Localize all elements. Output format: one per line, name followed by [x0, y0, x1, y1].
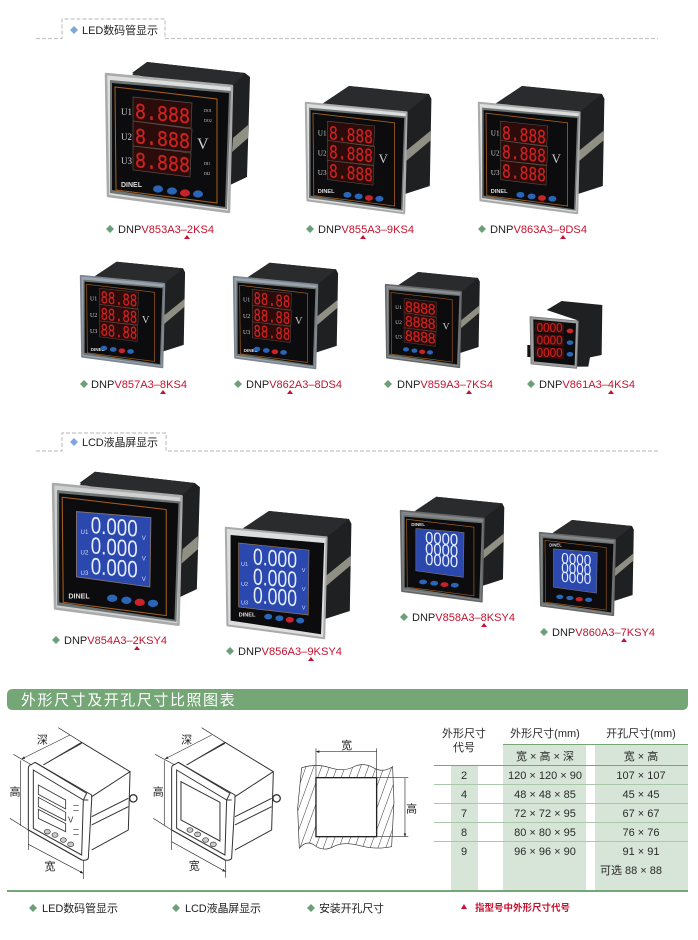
dimension table: 96 × 96 × 90	[514, 846, 576, 858]
meter: DNPV862A3-8DS4: 88.88	[254, 290, 290, 314]
meter: DNPV862A3-8DS4: V	[295, 316, 303, 327]
section heading: LCD display	[36, 433, 658, 451]
meter: DNPV859A3-7KS4: U3	[395, 335, 402, 341]
meter: DNPV862A3-8DS4: U2	[243, 314, 250, 320]
dimension table: 开孔尺寸(mm)	[606, 726, 676, 740]
label: DNPV853A3-2KS4: DNPV853A3–2KS4	[118, 224, 214, 236]
dimension table: 67 × 67	[622, 808, 660, 820]
meter: DNPV854A3-2KSY4: U3	[81, 570, 89, 577]
meter: DNPV855A3-9KS4: U3	[318, 169, 327, 177]
meter: DNPV857A3-8KS4: U2	[90, 313, 97, 319]
diagram: LED meter outline	[9, 728, 137, 879]
label: DNPV856A3-9KSY4: DNPV856A3–9KSY4	[238, 646, 342, 658]
meter: DNPV855A3-9KS4: 8.888	[329, 123, 373, 151]
legend: LED display: LED数码管显示	[42, 901, 118, 915]
meter: DNPV861A3-4KS4	[527, 301, 602, 368]
meter: DNPV857A3-8KS4: 88.88	[101, 289, 137, 313]
meter: DNPV861A3-4KS4: 0000	[537, 345, 563, 360]
meter: DNPV853A3-2KS4	[106, 62, 250, 212]
section heading: LED display	[36, 19, 658, 38]
meter: DNPV862A3-8DS4: U3	[243, 330, 250, 336]
meter: DNPV861A3-4KS4: 0000	[537, 320, 563, 335]
dimension table: 8	[461, 827, 467, 839]
section heading: LCD display: LCD液晶屏显示	[82, 435, 158, 449]
meter: DNPV856A3-9KSY4: U3	[241, 601, 248, 607]
legend: LCD display: LCD液晶屏显示	[185, 901, 261, 915]
legend: cutout size: 安装开孔尺寸	[319, 901, 384, 915]
dimension table: 120 × 120 × 90	[508, 770, 582, 782]
meter: DNPV857A3-8KS4: 88.88	[101, 306, 137, 329]
meter: DNPV860A3-7KSY4	[540, 520, 634, 615]
meter: DNPV859A3-7KS4: 8888	[405, 299, 436, 319]
meter: DNPV855A3-9KS4: U1	[318, 130, 327, 138]
label: DNPV854A3-2KSY4: DNPV854A3–2KSY4	[64, 635, 167, 647]
label: DNPV861A3-4KS4: DNPV861A3–4KS4	[539, 379, 635, 391]
meter: DNPV863A3-9DS4	[479, 86, 604, 213]
meter: DNPV859A3-7KS4: 8888	[405, 328, 436, 348]
meter: DNPV860A3-7KSY4: 0000	[561, 550, 591, 570]
meter: DNPV853A3-2KS4: U1	[121, 107, 132, 117]
meter: DNPV862A3-8DS4: 88.88	[254, 323, 290, 346]
meter: DNPV855A3-9KS4: 8.888	[329, 161, 373, 189]
dimension table: 4	[461, 789, 467, 801]
dimension table: 宽 × 高 × 深	[516, 749, 574, 763]
meter: DNPV854A3-2KSY4: V	[142, 535, 147, 542]
meter: DNPV855A3-9KS4: V	[379, 152, 389, 166]
meter: DNPV863A3-9DS4: U3	[491, 169, 500, 177]
meter: DNPV863A3-9DS4: 8.888	[502, 123, 546, 151]
meter: DNPV856A3-9KSY4: U2	[241, 582, 248, 588]
dimension table: 宽 × 高	[624, 749, 658, 763]
meter: DNPV863A3-9DS4: DINEL	[491, 189, 508, 195]
diagram: panel cutout: 宽	[341, 738, 352, 752]
dimension table: 7	[461, 808, 467, 820]
meter: DNPV856A3-9KSY4: 0.000	[253, 563, 297, 593]
meter: DNPV853A3-2KS4: DO2	[204, 118, 212, 123]
dimension table	[434, 726, 688, 892]
meter: DNPV857A3-8KS4: DINEL	[91, 347, 105, 352]
meter: DNPV854A3-2KSY4: 0.000	[91, 512, 138, 542]
meter: DNPV853A3-2KS4: 8.888	[135, 125, 190, 155]
meter: DNPV857A3-8KS4: U3	[90, 329, 97, 335]
meter: DNPV863A3-9DS4: U1	[491, 130, 500, 138]
meter: DNPV855A3-9KS4: 8.888	[329, 142, 373, 169]
heading bar: dimension comparison: 外形尺寸及开孔尺寸比照图表	[21, 692, 236, 709]
label: DNPV863A3-9DS4: DNPV863A3–9DS4	[490, 224, 587, 236]
meter: DNPV863A3-9DS4: 8.888	[502, 161, 546, 189]
meter: DNPV853A3-2KS4: DINEL	[121, 182, 143, 189]
meter: DNPV859A3-7KS4: U1	[395, 305, 402, 311]
meter: DNPV859A3-7KS4: U2	[395, 320, 402, 326]
meter: DNPV857A3-8KS4: U1	[90, 296, 97, 302]
meter: DNPV863A3-9DS4: V	[552, 152, 562, 166]
meter: DNPV854A3-2KSY4: 0.000	[91, 553, 138, 583]
dimension table: 91 × 91	[622, 846, 660, 858]
meter: DNPV854A3-2KSY4	[53, 472, 200, 625]
meter: DNPV858A3-8KSY4: 0000	[425, 550, 458, 571]
dimension table: 80 × 80 × 95	[514, 827, 576, 839]
meter: DNPV853A3-2KS4: U2	[121, 132, 132, 142]
meter: DNPV857A3-8KS4	[81, 262, 185, 367]
meter: DNPV853A3-2KS4: U3	[121, 156, 132, 166]
label: DNPV860A3-7KSY4: DNPV860A3–7KSY4	[552, 627, 655, 639]
label: DNPV855A3-9KS4: DNPV855A3–9KS4	[318, 224, 414, 236]
diagram: LCD meter outline: 宽	[189, 858, 200, 872]
meter: DNPV856A3-9KSY4: 0.000	[253, 543, 297, 573]
diagram: LCD meter outline	[153, 728, 280, 878]
meter: DNPV859A3-7KS4: 8888	[405, 314, 436, 333]
dimension table: 外形尺寸(mm)	[510, 726, 580, 740]
diagram: LED meter outline: 深	[37, 734, 48, 747]
meter: DNPV856A3-9KSY4: V	[302, 605, 306, 611]
dimension table: 外形尺寸	[442, 726, 486, 740]
dimension table: 代号	[453, 741, 475, 754]
meter: DNPV856A3-9KSY4: DINEL	[239, 613, 256, 619]
meter: DNPV856A3-9KSY4: U1	[241, 562, 248, 568]
diagram: panel cutout: 高	[406, 801, 417, 815]
meter: DNPV862A3-8DS4	[234, 263, 338, 368]
dimension table: 可选 88 × 88	[600, 864, 662, 877]
bottom rule	[7, 890, 688, 892]
meter: DNPV854A3-2KSY4: V	[142, 576, 147, 583]
label: DNPV862A3-8DS4: DNPV862A3–8DS4	[246, 379, 342, 391]
meter: DNPV859A3-7KS4: V	[443, 322, 450, 333]
meter: DNPV862A3-8DS4: U1	[243, 297, 250, 303]
meter: DNPV858A3-8KSY4: 0000	[425, 539, 458, 561]
meter: DNPV863A3-9DS4: 8.888	[502, 142, 546, 169]
meter: DNPV855A3-9KS4: U2	[318, 150, 327, 158]
meter: DNPV858A3-8KSY4: DINEL	[411, 522, 425, 527]
meter: DNPV857A3-8KS4: 88.88	[101, 322, 137, 345]
dimension table: 76 × 76	[622, 827, 660, 839]
diagram: panel cutout	[298, 738, 417, 849]
meter: DNPV853A3-2KS4: 8.888	[135, 100, 190, 130]
meter: DNPV853A3-2KS4: DO1	[204, 108, 212, 113]
label: DNPV859A3-7KS4: DNPV859A3–7KS4	[397, 379, 493, 391]
label: DNPV858A3-8KSY4: DNPV858A3–8KSY4	[412, 612, 515, 624]
dimension table: 45 × 45	[622, 789, 660, 801]
meter: DNPV856A3-9KSY4: V	[302, 587, 306, 593]
diagram: LED meter outline: 高	[9, 785, 20, 799]
meter: DNPV860A3-7KSY4: 0000	[561, 560, 591, 579]
dimension table: 72 × 72 × 95	[514, 808, 576, 820]
dimension table: 107 × 107	[616, 770, 666, 782]
diagram: LED meter outline: 宽	[44, 859, 55, 873]
meter: DNPV858A3-8KSY4	[401, 497, 504, 602]
meter: DNPV855A3-9KS4	[306, 86, 431, 213]
dimension table: 2	[461, 770, 467, 782]
label: DNPV857A3-8KS4: DNPV857A3–8KS4	[91, 379, 187, 391]
dimension table: 9	[461, 846, 467, 858]
heading bar: dimension comparison	[7, 689, 688, 710]
meter: DNPV854A3-2KSY4: U2	[81, 549, 89, 556]
legend: size code note: 指型号中外形尺寸代号	[475, 902, 570, 914]
meter: DNPV856A3-9KSY4: V	[302, 568, 306, 574]
meter: DNPV854A3-2KSY4: 0.000	[91, 532, 138, 562]
meter: DNPV863A3-9DS4: U2	[491, 150, 500, 158]
meter: DNPV853A3-2KS4: DI1	[204, 161, 210, 166]
meter: DNPV861A3-4KS4: 0000	[537, 332, 563, 347]
dimension table: 48 × 48 × 85	[514, 789, 576, 801]
diagram: LCD meter outline: 高	[153, 785, 164, 799]
meter: DNPV856A3-9KSY4: 0.000	[253, 582, 297, 611]
meter: DNPV862A3-8DS4: 88.88	[254, 307, 290, 330]
meter: DNPV856A3-9KSY4	[226, 511, 351, 638]
meter: DNPV853A3-2KS4: DI2	[204, 171, 210, 176]
diagram: LCD meter outline: 深	[181, 734, 192, 747]
meter: DNPV858A3-8KSY4: 0000	[425, 528, 458, 550]
meter: DNPV860A3-7KSY4: DINEL	[549, 542, 562, 547]
meter: DNPV854A3-2KSY4: V	[142, 556, 147, 563]
meter: DNPV862A3-8DS4: DINEL	[244, 348, 258, 353]
section heading: LED display: LED数码管显示	[82, 23, 158, 37]
diagram: LED meter outline: V	[68, 815, 74, 824]
meter: DNPV853A3-2KS4: 8.888	[135, 149, 190, 179]
meter: DNPV853A3-2KS4: V	[197, 136, 209, 153]
meter: DNPV857A3-8KS4: V	[142, 315, 150, 326]
meter: DNPV860A3-7KSY4: 0000	[561, 569, 591, 588]
meter: DNPV854A3-2KSY4: DINEL	[68, 592, 90, 600]
meter: DNPV859A3-7KS4	[386, 272, 480, 367]
meter: DNPV854A3-2KSY4: U1	[81, 529, 89, 536]
meter: DNPV855A3-9KS4: DINEL	[318, 189, 335, 195]
